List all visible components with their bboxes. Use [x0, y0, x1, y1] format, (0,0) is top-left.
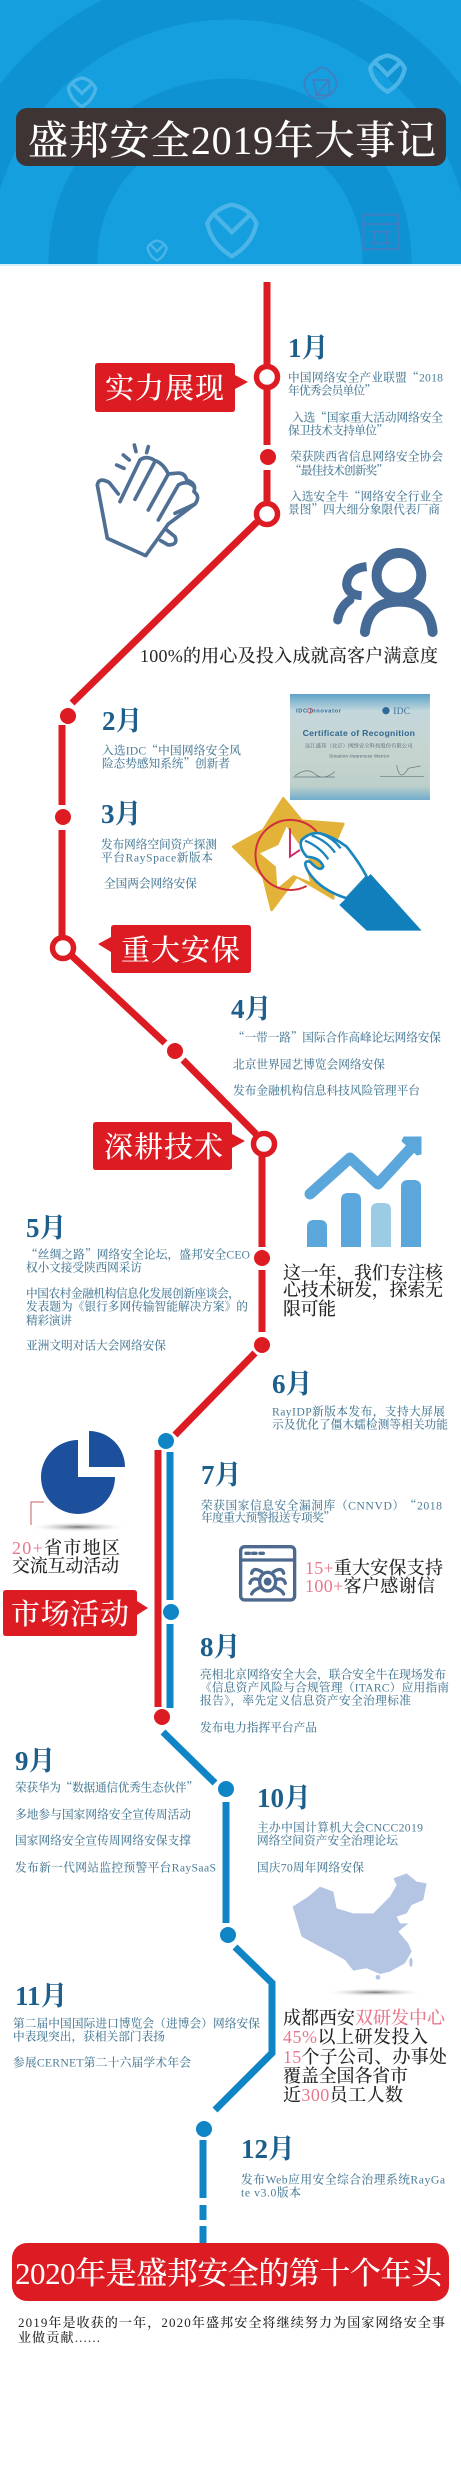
event list: 示及优化了僵木蠕检测等相关功能: [272, 1418, 448, 1432]
event list: 发布金融机构信息科技风险管理平台: [233, 1084, 420, 1098]
event list: “一带一路”国际合作高峰论坛网络安保: [233, 1030, 441, 1046]
event list: [102, 742, 241, 772]
statement: company scale: 15个子公司、办事处: [283, 2047, 448, 2067]
banner: tenth year: [12, 2243, 449, 2301]
event list: 年度重大预警报送专项奖”: [201, 1510, 335, 1526]
month heading: 5月: [26, 1213, 66, 1243]
month heading: 12月: [241, 2134, 295, 2164]
icon: star and hand: [233, 798, 422, 931]
event list: [15, 1780, 216, 1874]
event list: 发布Web应用安全综合治理系统RayGa: [241, 2172, 446, 2186]
event list: 发表题为《银行多网传输智能解决方案》的: [26, 1300, 248, 1314]
certificate photo: Situation Awareness Warrior: [329, 754, 390, 759]
icon: clapping hands: [97, 445, 198, 556]
panel: 9月: [15, 1746, 216, 1874]
month heading: 7月: [201, 1460, 242, 1490]
event list: 中国网络安全产业联盟“2018: [288, 370, 443, 386]
event list: 荣获陕西省信息网络安全协会: [290, 450, 443, 464]
event list: 景图”四大细分象限代表厂商: [288, 502, 440, 518]
closing paragraph: [18, 2315, 445, 2345]
panel: 10月: [257, 1783, 423, 1874]
event list: [257, 1820, 423, 1874]
event list: 国家网络安全宣传周网络安保支撑: [15, 1834, 191, 1848]
event list: 国庆70周年网络安保: [257, 1860, 364, 1874]
panel: 5月: [26, 1213, 250, 1352]
statement: company scale: 成都西安双研发中心: [283, 2008, 446, 2028]
title: 盛邦安全2019年大事记: [28, 118, 436, 163]
event list: [272, 1404, 448, 1432]
event list: [288, 370, 443, 518]
banner: tenth year: 2020年是盛邦安全的第十个年头: [15, 2256, 443, 2291]
event list: 亮相北京网络安全大会，联合安全牛在现场发布: [200, 1668, 446, 1682]
event list: 网络空间资产安全治理论坛: [257, 1834, 399, 1848]
statement: security support: 100+客户感谢信: [305, 1576, 435, 1596]
panel: 6月: [272, 1369, 448, 1432]
event list: 中表现突出，获相关部门表扬: [13, 2030, 165, 2044]
closing paragraph: 业做贡献......: [18, 2330, 100, 2345]
month heading: 9月: [15, 1746, 56, 1776]
event list: RayIDP新版本发布，支持大屏展: [272, 1404, 445, 1418]
tag: 深耕技术: 深耕技术: [104, 1131, 223, 1164]
event list: 发布新一代网站监控预警平台RaySaaS: [15, 1860, 216, 1874]
event list: [101, 838, 217, 890]
statement: security support: [305, 1558, 443, 1596]
statement: company scale: 45%以上研发投入: [283, 2026, 428, 2047]
statement: core technology: 限可能: [283, 1299, 336, 1319]
event list: 亚洲文明对话大会网络安保: [26, 1338, 166, 1352]
icon: pie chart: [28, 1431, 128, 1532]
panel: 8月: [200, 1632, 449, 1734]
event list: 参展CERNET第二十六届学术年会: [13, 2056, 191, 2070]
event list: 发布网络空间资产探测: [101, 838, 217, 852]
event list: 入选“国家重大活动网络安全: [292, 410, 443, 426]
tag: 重大安保: [98, 925, 251, 973]
icon: growth bar chart: [307, 1137, 421, 1247]
satisfaction statement: 100%的用心及投入成就高客户满意度: [140, 645, 438, 666]
tag: 深耕技术: [93, 1122, 245, 1170]
event list: [201, 1498, 442, 1526]
statement: core technology: [283, 1262, 444, 1319]
panel: 2月: [102, 706, 241, 772]
tag: 市场活动: [3, 1590, 148, 1636]
event list: 年优秀会员单位”: [288, 382, 376, 398]
event list: 多地参与国家网络安全宣传周活动: [15, 1808, 191, 1822]
statement: company scale: [283, 2008, 448, 2105]
event list: “最佳技术创新奖”: [290, 462, 388, 478]
timeline route: [52, 282, 278, 2243]
month heading: 1月: [288, 333, 328, 363]
event list: 险态势感知系统”创新者: [102, 756, 230, 772]
certificate photo: [290, 694, 430, 800]
event list: [241, 2172, 446, 2200]
event list: [200, 1668, 449, 1734]
panel: 12月: [241, 2134, 446, 2200]
event list: 保卫技术支持单位”: [288, 422, 388, 438]
closing paragraph: 2019年是收获的一年，2020年盛邦安全将继续努力为国家网络安全事: [18, 2315, 445, 2331]
event list: 报告》，率先定义信息资产安全治理标准: [200, 1694, 411, 1708]
event list: “丝绸之路”网络安全论坛，盛邦安全CEO: [26, 1246, 250, 1262]
event list: 权小文接受陕西网采访: [26, 1260, 142, 1274]
tag: 实力展现: [95, 363, 248, 412]
event list: 中国农村金融机构信息化发展创新座谈会，: [26, 1286, 240, 1300]
event list: [26, 1246, 250, 1352]
tag: 重大安保: 重大安保: [121, 934, 240, 967]
event list: 第二届中国国际进口博览会（进博会）网络安保: [13, 2016, 260, 2030]
event list: 精彩演讲: [26, 1314, 72, 1328]
icon: browser bug: [241, 1547, 295, 1600]
event list: 平台RaySpace新版本: [101, 850, 213, 864]
statement: core technology: 这一年，我们专注核: [283, 1262, 444, 1284]
event list: 北京世界园艺博览会网络安保: [233, 1058, 385, 1072]
event list: te v3.0版本: [241, 2186, 301, 2200]
event list: [13, 2016, 260, 2070]
event list: 《信息资产风险与合规管理（ITARC）应用指南: [200, 1680, 449, 1694]
event list: 入选安全牛“网络安全行业全: [290, 488, 443, 504]
tag: 市场活动: 市场活动: [11, 1598, 129, 1631]
event list: [233, 1030, 441, 1098]
certificate photo: Certificate of Recognition: [303, 728, 415, 738]
statement: security support: 15+重大安保支持: [305, 1558, 443, 1578]
statement: regional events: [12, 1538, 120, 1576]
certificate photo: 远江盛邦（北京）网络安全科技股份有限公司: [305, 742, 413, 750]
statement: regional events: 20+省市地区: [12, 1538, 120, 1558]
statement: core technology: 心技术研发，探索无: [283, 1279, 443, 1301]
month heading: 4月: [231, 994, 272, 1024]
month heading: 2月: [102, 706, 142, 736]
month heading: 6月: [272, 1369, 312, 1399]
panel: 1月: [288, 333, 443, 518]
map of China: [293, 1873, 427, 1996]
statement: regional events: 交流互动活动: [12, 1556, 119, 1576]
event list: 发布电力指挥平台产品: [200, 1720, 317, 1734]
certificate photo: IDC: [393, 707, 410, 717]
statement: company scale: 近300员工人数: [283, 2085, 403, 2105]
certificate photo: IDC Innovator: [296, 708, 342, 714]
panel: 4月: [231, 994, 441, 1098]
tag: 实力展现: 实力展现: [105, 372, 224, 405]
event list: 荣获华为“数据通信优秀生态伙伴”: [15, 1780, 198, 1796]
month heading: 10月: [257, 1783, 311, 1813]
month heading: 3月: [101, 799, 142, 829]
event list: 全国两会网络安保: [104, 876, 197, 890]
month heading: 11月: [15, 1981, 68, 2011]
panel: 11月: [13, 1981, 260, 2070]
month heading: 8月: [200, 1632, 240, 1662]
event list: 主办中国计算机大会CNCC2019: [257, 1820, 423, 1834]
statement: company scale: 覆盖全国各省市: [283, 2066, 408, 2086]
icon: customers: [338, 553, 433, 632]
panel: 3月: [101, 799, 217, 890]
event list: 荣获国家信息安全漏洞库（CNNVD）“2018: [201, 1498, 442, 1514]
panel: 7月: [201, 1460, 442, 1526]
header banner: [0, 0, 461, 266]
event list: 入选IDC“中国网络安全风: [102, 742, 241, 758]
